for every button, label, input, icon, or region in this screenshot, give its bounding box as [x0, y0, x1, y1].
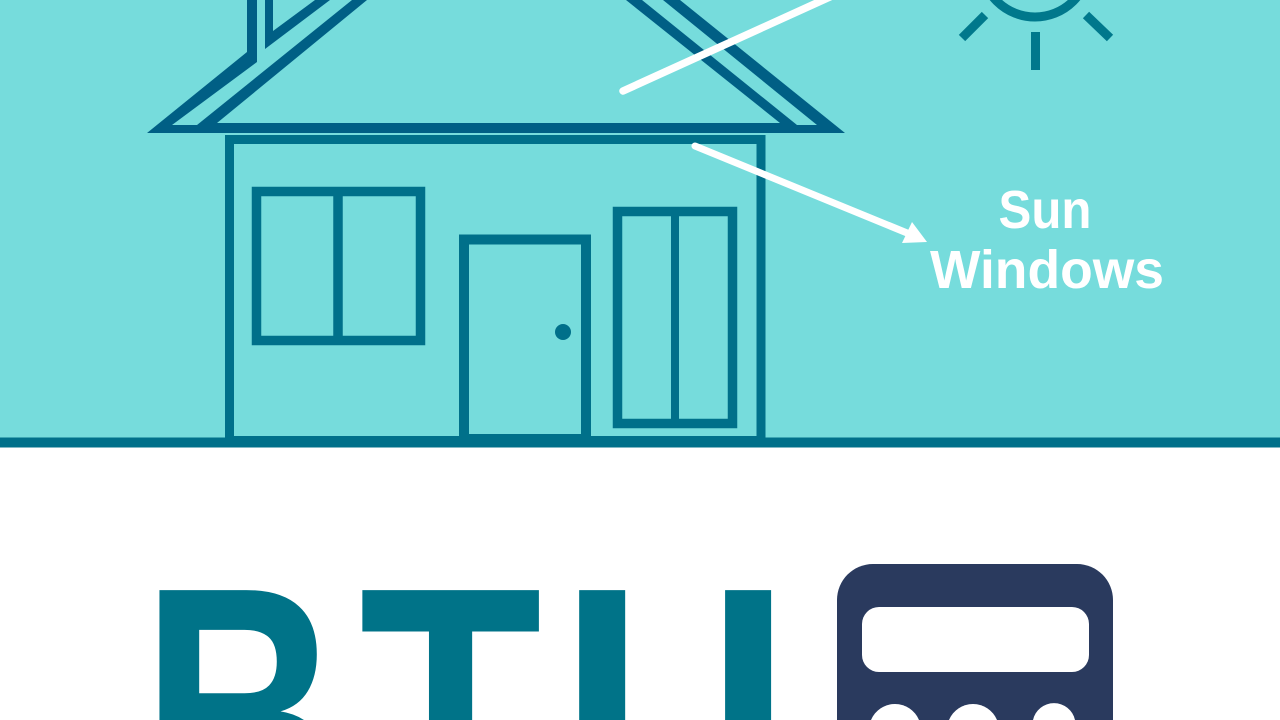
panel: house scene background — [0, 0, 1280, 443]
heading: BTU — [141, 509, 791, 720]
label: Sun Windows: Sun — [998, 180, 1092, 240]
icon: calculator — [837, 564, 1113, 720]
arrow to sun windows label — [695, 146, 927, 243]
door knob — [555, 324, 571, 340]
left window — [256, 191, 420, 341]
right window — [618, 211, 732, 424]
label: Sun Windows — [930, 180, 1164, 300]
label: Sun Windows: Windows — [930, 240, 1164, 300]
calculator screen — [862, 607, 1089, 672]
door — [464, 240, 586, 439]
house illustration — [147, 0, 845, 440]
calculator buttons — [871, 703, 1075, 720]
white sun ray line — [623, 0, 832, 91]
icon: sun — [962, 0, 1110, 70]
house roof and chimney — [147, 0, 845, 133]
ground line — [0, 438, 1280, 448]
house body wall — [230, 140, 761, 440]
panel: BTU calculator section — [0, 448, 1280, 720]
